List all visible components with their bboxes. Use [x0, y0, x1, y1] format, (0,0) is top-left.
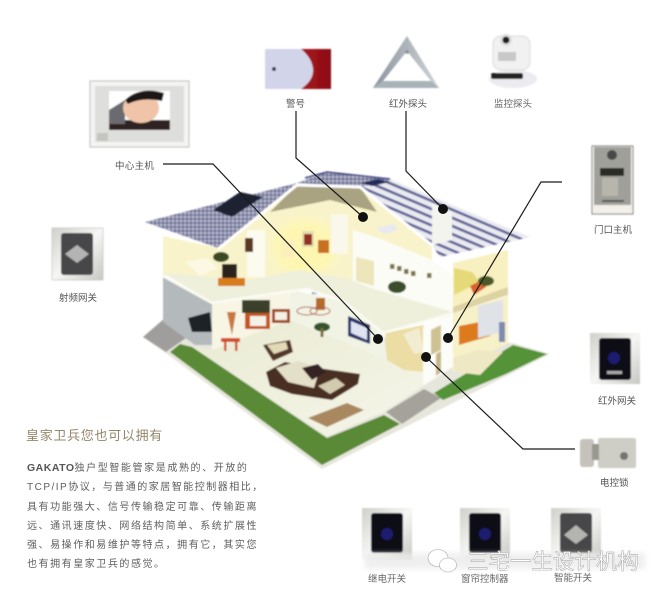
cabinet	[242, 300, 290, 329]
connector: 红外探头	[406, 111, 448, 214]
device: smart switch	[551, 508, 601, 560]
watermark: wechat icon	[428, 550, 456, 572]
roof fascia	[218, 185, 433, 249]
right ground room	[453, 296, 508, 372]
watermark text: 三宅一生设计机构	[467, 550, 639, 574]
label: 监控探头: 监控探头	[494, 98, 532, 110]
watermark band	[365, 553, 645, 569]
device: curtain controller	[460, 508, 510, 560]
device: infrared sensor	[373, 36, 439, 88]
car	[188, 312, 212, 332]
lawn left	[170, 344, 400, 465]
label: 电控锁: 电控锁	[600, 477, 629, 489]
air conditioner upper	[376, 224, 398, 234]
ceiling	[270, 185, 377, 212]
ground floor	[193, 320, 423, 436]
ground floor air conditioner and wall art	[297, 290, 332, 315]
ground floor left wall	[212, 292, 290, 350]
garage	[163, 275, 212, 345]
label: 窗帘控制器: 窗帘控制器	[461, 573, 509, 585]
right room floor	[453, 350, 503, 375]
picture row	[390, 264, 432, 278]
label: 警号: 警号	[286, 98, 305, 110]
sculpture and red table	[221, 312, 240, 351]
path	[386, 389, 441, 424]
sofa set	[266, 361, 360, 400]
tv	[348, 316, 370, 344]
label: 射频网关: 射频网关	[59, 292, 98, 304]
body paragraph: 也有拥有皇家卫兵的感觉。	[27, 557, 166, 570]
label: 中心主机: 中心主机	[115, 160, 154, 172]
body paragraph: 具有功能强大、信号传输稳定可靠、传输距离	[27, 500, 258, 513]
upper floor surface	[163, 270, 453, 332]
label: 智能开关: 智能开关	[554, 572, 593, 584]
left bedroom	[185, 230, 265, 286]
right bedroom	[453, 250, 508, 313]
plant ground floor	[314, 322, 330, 337]
label: 红外探头: 红外探头	[389, 98, 427, 110]
connector: 电控锁	[421, 352, 575, 449]
connector: 门口主机	[443, 182, 562, 343]
device: surveillance camera	[489, 34, 537, 88]
left roof	[145, 183, 297, 248]
skylights	[213, 192, 263, 217]
armchair	[263, 340, 293, 361]
device: alarm siren	[265, 49, 331, 89]
slab edge	[163, 276, 453, 333]
ground slab	[143, 318, 550, 469]
middle room art and furniture	[281, 214, 348, 258]
label: 门口主机: 门口主机	[594, 224, 633, 236]
window	[478, 300, 503, 338]
house cutaway illustration	[143, 172, 550, 469]
body paragraph: 远、通讯速度快、网络结构简单、系统扩展性	[27, 519, 258, 532]
chimney	[432, 203, 452, 245]
glow back room	[273, 220, 337, 276]
device: center host monitor	[90, 81, 189, 147]
doormat	[308, 403, 364, 427]
body paragraph: GAKATO独户型智能管家是成熟的、开放的	[27, 461, 249, 474]
living room wall	[290, 290, 387, 360]
stair area	[385, 325, 424, 372]
device: RF gateway	[52, 228, 103, 280]
orange cabinet	[459, 320, 490, 345]
device: infrared gateway	[590, 333, 640, 384]
driveway	[143, 318, 193, 352]
label: 红外网关: 红外网关	[598, 395, 637, 407]
upper floor back room	[163, 185, 432, 300]
body paragraph	[27, 461, 264, 570]
front wall with door	[423, 313, 453, 386]
top ridge	[297, 172, 392, 187]
upper right white wall	[353, 230, 453, 312]
heading: 皇家卫兵您也可以拥有	[26, 428, 163, 443]
connector: 中心主机	[163, 164, 383, 344]
device: relay switch	[362, 508, 412, 560]
body paragraph: TCP/IP协议，与普通的家居智能控制器相比，	[27, 480, 264, 493]
device: electric lock	[580, 438, 636, 468]
plant upper hall	[388, 281, 406, 293]
right roof	[360, 180, 530, 257]
lawn right	[434, 345, 547, 400]
body paragraph: 强、易操作和易维护等特点，拥有它，其实您	[27, 538, 258, 551]
label: 继电开关: 继电开关	[368, 573, 407, 585]
curtain	[499, 322, 505, 342]
connector: 警号	[296, 111, 368, 222]
door in wall	[356, 257, 374, 286]
device: door station	[592, 146, 633, 214]
